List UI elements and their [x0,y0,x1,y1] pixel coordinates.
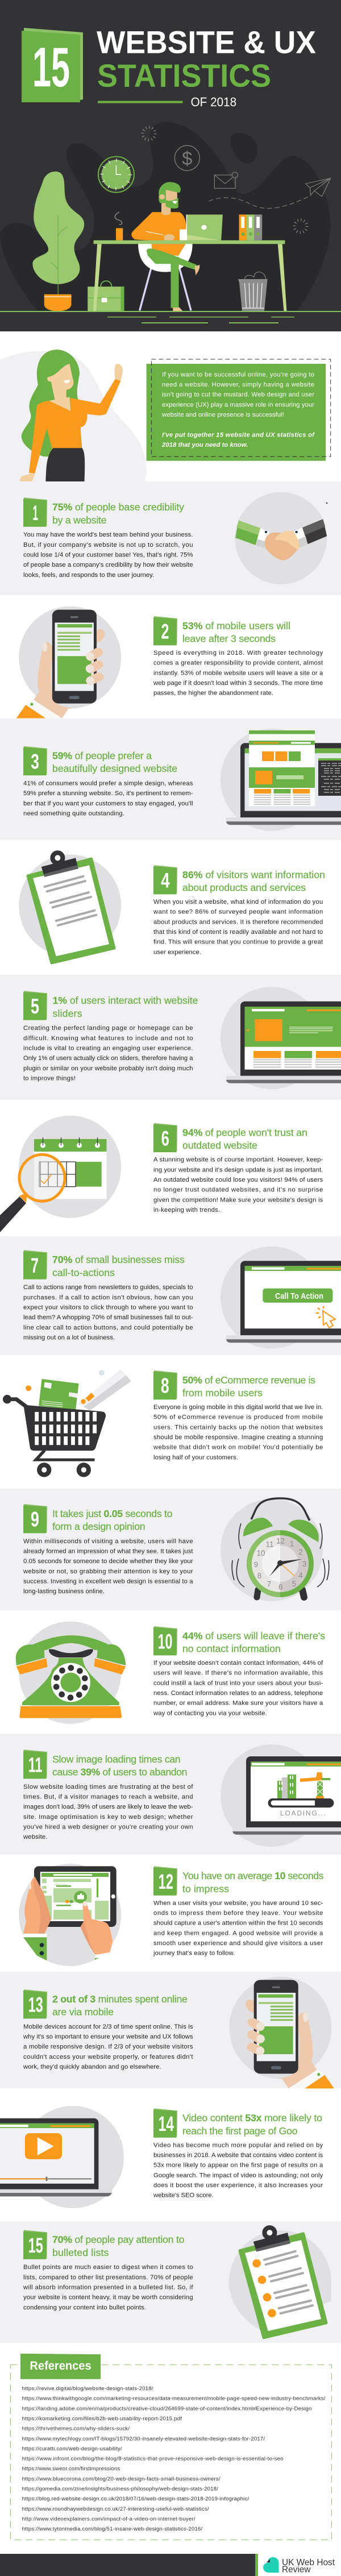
body text: find. This will ensure that you continue to provide a great [153,939,323,946]
heading: 1% of users interact with website [52,995,198,1006]
panel: stat 1 [0,481,341,595]
icon: alarm clock: 2 [298,1548,303,1556]
heading: Slow image loading times can [52,1754,181,1765]
panel: stat 15 [0,2221,341,2343]
body text: about products and services. It is therefore recommended [153,919,323,925]
heading [182,2112,322,2137]
intro text box: If you want to be successful online, you're going to [162,371,314,378]
intro text box: I've put together 15 website and UX statistics of [162,431,315,438]
reference list: https://www.bluecorona.com/blog/20-web-design-facts-small-business-owners/ [22,2476,221,2482]
body text: in-keeping with trends. [153,1207,220,1214]
heading: 53% of mobile users will [182,620,290,631]
body text: lists, compared to other list presentations. 70% of people [23,2274,193,2281]
heading: by a website [52,514,107,526]
heading [52,501,184,526]
references heading [20,2354,101,2379]
heading [52,1754,188,1778]
body text: should capture a user's attention within the first 10 seconds [153,1920,323,1927]
number badge 5 [23,991,47,1020]
body text: could lose 1/4 of your customer base! Yes, that's right. 75% [23,551,193,558]
intro text box: isn't going to cut the mustard. Web design and user [162,392,314,398]
number badge 13: 13 [28,1993,43,2017]
body text: A stunning website is of course important. However, keep- [153,1157,323,1164]
icon: telephone [16,1622,126,1724]
number badge 9 [23,1504,47,1533]
icon: clipboard [19,853,121,963]
heading: 70% of small businesses miss [52,1254,185,1265]
body text: website. [23,1834,47,1840]
number badge 4 [153,865,177,894]
number badge 6 [153,1123,177,1152]
body text: you've hired a web designer or you're creating your own [23,1823,193,1830]
body text: want to see? 86% of surveyed people want information [153,909,323,916]
icon: dollar coin [174,146,199,171]
heading: are via mobile [52,2006,114,2018]
heading: to impress [182,1883,229,1894]
heading [182,1374,315,1398]
body text: 41% of consumers would prefer a simple design, whereas [23,780,193,787]
body text: Call to actions range from newsletters to guides, specials to [23,1284,193,1291]
number badge 7 [23,1250,47,1279]
heading [52,1508,173,1532]
heading: form a design opinion [52,1521,145,1532]
heading [52,750,177,774]
body text: Creating the perfect landing page or homepage can be [23,1025,193,1032]
heading: about products and services [182,882,306,894]
body text: site. Image optimisation is key to web design; whether [23,1814,193,1821]
panel: stat 6 [0,1116,323,1232]
icon: hands on tablet: LOREM IPSUM [53,1884,68,1886]
body text: purchases. If a call to action isn't obvious, how can you [23,1294,193,1301]
icon: alarm clock: 1 [290,1539,294,1548]
body text: expect your visitors to click through to where you want to [23,1304,193,1311]
body text [23,1538,193,1595]
body text: way of contacting you via your website. [153,1710,267,1717]
intro text box: experience (UX) play a massive role in ensuring your [162,401,314,408]
heading: It takes just 0.05 seconds to [52,1508,173,1519]
body text: looks, feels, and responds to the user journey. [23,572,154,579]
panel: stat 2 [16,606,323,718]
panel: references [10,2354,332,2540]
icon: clipboard with bullets [229,2228,331,2338]
footer [0,2554,335,2576]
body text: does it boost the user experience, it also increases your [153,2182,323,2189]
number badge 9: 9 [31,1507,39,1531]
body text: Within milliseconds of visiting a website, users will have [23,1538,193,1545]
body text: line clear call to action buttons, and could potentially be [23,1324,193,1331]
reference list: https://landing.adobe.com/en/na/products/creative-cloud/264699-state-of-content/index.html#Experience-by-Design [22,2405,311,2412]
reference list: https://curatti.com/web-design-usability/ [22,2446,122,2452]
icon: laptop with call to action button [221,1247,341,1349]
reference list: https://www.thinkwithgoogle.com/marketing-resources/data-measurement/mobile-page-speed-new-industry-benchmarks/ [22,2396,326,2402]
body text [153,2142,323,2199]
body text [153,1404,323,1461]
heading: 59% of people prefer a [52,750,152,762]
body text: Speed is everything in 2018. With greater technology [153,650,323,657]
body text: already formed an impression of what they see. It takes just [23,1548,193,1555]
heading: You have on average 10 seconds [182,1870,324,1881]
number badge 3 [23,746,47,775]
icon: dollar coin: $ [182,148,192,169]
body text: passes, the higher the abandonment rate. [153,690,273,697]
logo: UK Web Host [282,2558,335,2567]
body text: 50% of eCommerce revenue is produced from mobile [153,1414,323,1421]
body text: But, if your company's website is not up to scratch, you [23,542,193,549]
panel: stat 5 [0,975,341,1100]
icon: alarm clock: 11 [265,1540,274,1548]
header panel [0,0,341,331]
reference list [22,2386,326,2532]
subtitle: OF 2018 [191,95,236,109]
body text: long-lasting business online. [23,1588,105,1595]
heading [182,1630,325,1654]
number badge 13 [23,1989,47,2018]
number badge 15 [23,2230,47,2259]
body text [153,899,323,955]
body text: users. This certainly backs up the notion that websites [153,1424,323,1431]
number badge 11: 11 [28,1753,43,1777]
progress bar [0,2177,92,2181]
heading: leave after 3 seconds [182,633,276,645]
icon: laptop loading screen [221,1744,341,1847]
body text [23,1284,193,1341]
icon: shopping cart [3,1369,131,1477]
panel: stat 9 [0,1489,341,1610]
number badge 8 [153,1370,177,1399]
icon: coffee cup [115,212,123,240]
reference list: https://blog.red-website-design.co.uk/2018/07/16/web-design-stats-2018-2019-infographic/ [22,2496,249,2502]
icon: handshake [235,492,327,584]
body text: plugin or similar on your website probably isn't doing much [23,1065,193,1072]
office illustration [0,122,331,311]
body text: difficult. Knowing what features to include and not to [23,1035,193,1042]
icon: hand holding phone [229,1977,334,2088]
body text: include is vital to creating an engaging user experience. [23,1045,193,1052]
number badge 5: 5 [31,994,39,1018]
panel: stat 7 [0,1236,341,1355]
icon: alarm clock: 12 [276,1537,285,1545]
icon: laptop on desk [180,214,223,240]
icon: desk [93,244,286,311]
heading: call-to-actions [52,1267,115,1278]
heading [52,2234,185,2258]
body text: comes a greater responsibility to provide content, almost [153,660,323,667]
icon: alarm clock: 10 [256,1549,265,1557]
panel: stat 13 [0,1972,341,2088]
icon: laptop with slider [221,987,341,1089]
heading [182,869,325,894]
body text: success. Investing in excellent web design is essential to a [23,1578,193,1585]
heading: 70% of people pay attention to [52,2234,185,2245]
title [22,24,316,109]
body text: should be mobile responsive. Imagine creating a stunning [153,1434,323,1441]
body text: An outdated website could lose you visitors! 94% of users [153,1177,323,1183]
reference list: https://www.infront.com/blog/the-blog/8-statistics-that-prove-responsive-web-design-is-essential-to-seo [22,2456,284,2462]
panel: stat 10 [16,1622,325,1724]
button [263,1289,333,1303]
number badge 14: 14 [159,2112,174,2135]
icon: laptop video player [0,2106,124,2208]
number badge 1: 1 [32,501,38,525]
body text: of people base a company's credibility by how their website [23,562,193,568]
body text: smooth user experience and should give visitors a user [153,1940,323,1947]
body text: website or not, so grabbing their attention is key to your [23,1568,193,1575]
body text: ing your website and it's design update is just as important. [153,1166,323,1173]
heading: 94% of people won't trust an [182,1127,307,1138]
body text: images don't load, 39% of users are likely to leave the web- [23,1804,193,1810]
icon: alarm clock [221,1498,329,1601]
number badge 12 [153,1866,177,1896]
body text: given the competition! Make sure your website's design is [153,1196,323,1203]
icon: alarm clock: 9 [254,1560,258,1569]
reference list: https://www.sweor.com/firstimpressions [22,2466,120,2472]
body text: website that didn't work on mobile! You'd potentially be [153,1444,323,1451]
body text: Video has become much more popular and relied on by [153,2142,323,2149]
body text: instantly. 53% of mobile website users will leave a site or a [153,670,323,676]
number badge 12: 12 [159,1869,173,1893]
number badge 8: 8 [161,1374,169,1398]
icon: alarm clock: 3 [302,1560,307,1568]
number badge 2: 2 [161,620,169,643]
body text: journey that's easy to follow. [153,1950,235,1957]
icon: cursor [316,1306,335,1328]
title line: website and ux: WEBSITE & UX [97,24,316,60]
body text: times. But, if a visitor manages to reach a website, and [23,1794,193,1801]
icon: waste bin [238,272,268,311]
body text [23,1784,193,1840]
body text: website's SEO score. [153,2192,214,2199]
body text: number, or email address. Make sure your visitors have a [153,1700,323,1707]
number badge 3: 3 [31,749,39,773]
number badge 14 [153,2108,177,2138]
heading [52,1254,185,1278]
body text: work, they'd quickly abandon and go elsewhere. [23,2063,161,2070]
reference list: https://revive.digital/blog/website-design-stats-2018/ [22,2386,153,2392]
heading: 2 out of 3 minutes spent online [52,1993,188,2005]
body text: When you visit a website, what kind of information do you [153,899,323,905]
body text: If your website doesn't contain contact information, 44% of [153,1660,323,1667]
heading: 75% of people base credibility [52,501,184,513]
icon: alarm clock: 5 [292,1580,296,1588]
heading: 86% of visitors want information [182,869,325,880]
icon: envelope [214,172,238,188]
number badge 2 [153,616,177,645]
body text: and keep them engaged. A good website will provide a [153,1930,323,1937]
title line: statistics: STATISTICS [97,58,271,94]
logo: Review [282,2565,311,2575]
intro text box: need a website. However, simply having a website [162,381,314,388]
heading: reach the first page of Goo [182,2125,298,2137]
body text [153,1157,323,1214]
reference list: https://thrivethemes.com/why-sliders-suck/ [22,2426,130,2432]
panel: stat 11 [0,1734,341,1855]
body text: ness. Contact information relates to an address, telephone [153,1690,323,1697]
heading [182,1870,324,1894]
body text [153,1660,323,1717]
icon: hand holding phone [16,606,121,718]
body text: couldn't access your website properly, or features didn't [23,2054,193,2060]
body text [23,2024,193,2070]
body text: Mobile devices account for 2/3 of time spent online. This is [23,2024,193,2030]
reference list: https://www.mytechlogy.com/IT-blogs/15792/30-insanely-elevated-website-design-stats-for-2017/ [22,2436,265,2442]
intro text box [147,359,331,461]
body text: could instill a lack of trust into your users about your busi- [153,1680,323,1686]
icon: calendar and magnifier [0,1116,121,1232]
icon: alarm clock: 4 [298,1571,303,1580]
heading: sliders [52,1008,82,1019]
icon: paper plane [209,178,331,208]
intro text box: 2018 that you need to know. [161,442,248,448]
icon: binders [239,214,262,240]
person at desk [131,182,199,311]
body text: condensing your content into bullet points. [23,2304,146,2311]
body text [153,1900,323,1957]
body text: lead them? A whopping 70% of small businesses fail to out- [23,1314,193,1321]
body text: 0.05 seconds for someone to decide whether they like your [23,1558,193,1565]
intro text box: website and online presence is successful! [161,412,284,418]
icon: bag [88,281,124,311]
icon: hands on tablet [19,1864,121,1966]
heading: 50% of eCommerce revenue is [182,1374,315,1386]
heading: no contact information [182,1643,281,1654]
heading: beautifully designed website [52,763,177,774]
play button [25,2133,62,2159]
body text: need something quite outstanding. [23,811,124,817]
body text: web page if it doesn't load within 3 seconds. The more time [153,680,323,687]
heading: outdated website [182,1140,257,1151]
body text: Slow website loading times are frustrating at the best of [23,1784,193,1790]
number badge 15: 15 [32,36,70,98]
body text: user experience. [153,949,201,955]
panel: stat 3 [0,718,341,840]
body text: no longer trust outdated websites, and it's no surprise [153,1187,323,1194]
body text: Only 1% of users actually click on sliders, therefore having a [23,1055,193,1062]
references heading: References [30,2359,92,2373]
body text: onds to impress them before they leave. Your website [153,1910,323,1917]
heading: cause 39% of users to abandon [52,1767,188,1778]
construction graphic [277,1772,330,1798]
body text: users will leave. If there's no information available, this [153,1670,323,1677]
body text: ber that if you want your customers to stay engaged, you'll [23,800,193,807]
body text: 53x more likely to appear on the first page of results on a [153,2162,323,2169]
body text: missing out on a lot of business. [23,1334,115,1341]
loading bar: LOADING... [280,1809,326,1817]
icon: laptop with web page [221,729,341,831]
heading [52,995,198,1019]
loading bar [268,1798,334,1817]
heading: Video content 53x more likely to [182,2112,322,2124]
number badge 10: 10 [158,1630,173,1653]
panel: stat 4 [19,853,325,963]
body text: losing half of your customers. [153,1454,238,1461]
heading [182,1127,307,1151]
body text [23,2264,193,2311]
icon: plant [32,172,84,311]
heading [182,620,290,645]
button: Call To Action [275,1291,323,1301]
body text: will absorb information presented in a bulleted list. So, if [23,2284,193,2291]
body text [153,650,323,697]
body text: Everyone is going mobile in this digital world that we live in. [153,1404,323,1411]
body text: why it's so important to ensure your website and UX follows [23,2034,193,2041]
panel: stat 12 [19,1864,324,1966]
heading [52,1993,188,2018]
reference list: http://www.videoexplainers.com/impact-of-a-video-on-internet-buyer/ [22,2516,196,2523]
heading: from mobile users [182,1387,263,1398]
body text: a mobile responsive design. If 2/3 of your website visitors [23,2043,193,2050]
body text [23,1025,193,1082]
body text: Google search. The impact of video is astounding; not only [153,2172,323,2179]
body text: When a user visits your website, you have around 10 sec- [153,1900,323,1906]
intro panel [0,350,331,481]
logo [263,2557,335,2575]
number badge 4: 4 [161,869,170,892]
reference list: https://gomedia.com/zine/insights/business-philosophy/web-design-stats-2018/ [22,2486,218,2492]
heading: 44% of users will leave if there's [182,1630,325,1642]
body text: Bullet points are much easier to digest when it comes to [23,2264,193,2271]
number badge 1 [23,497,47,527]
icon: alarm clock: 7 [267,1580,271,1588]
body text: businesses in 2018. A website that contains video content is [153,2152,323,2159]
body text: that this kind of content is readily available and not hard to [153,929,323,936]
icon: alarm clock: 8 [257,1572,261,1580]
body text [23,531,193,579]
number badge 10 [153,1626,177,1655]
body text: You may have the world's best team behind your business. [23,531,193,538]
reference list: https://www.roundhaywebdesign.co.uk/27-interesting-useful-web-statistics/ [22,2506,209,2512]
icon: alarm clock: 6 [278,1582,282,1592]
panel: stat 8 [3,1369,323,1477]
panel: stat 14 [0,2106,323,2208]
reference list: https://komarketing.com/files/b2b-web-usability-report-2015.pdf [22,2416,182,2422]
icon: wall clock [98,157,134,192]
number badge 11 [23,1750,47,1779]
woman waving [20,350,123,481]
number badge 15 [22,28,83,102]
body text: your website is content heavy, it may be worth considering [23,2294,193,2301]
body text: 59% prefer a stunning website. So, it's pertinent to remem- [23,790,193,797]
number badge 7: 7 [31,1253,39,1277]
number badge 15: 15 [28,2233,43,2257]
body text: to improve things! [23,1075,76,1082]
body text [23,780,193,817]
heading: bulleted lists [52,2247,109,2258]
number badge 6: 6 [161,1126,169,1150]
reference list: https://www.tytonmedia.com/blog/51-insane-web-design-statistics-2016/ [22,2526,203,2532]
